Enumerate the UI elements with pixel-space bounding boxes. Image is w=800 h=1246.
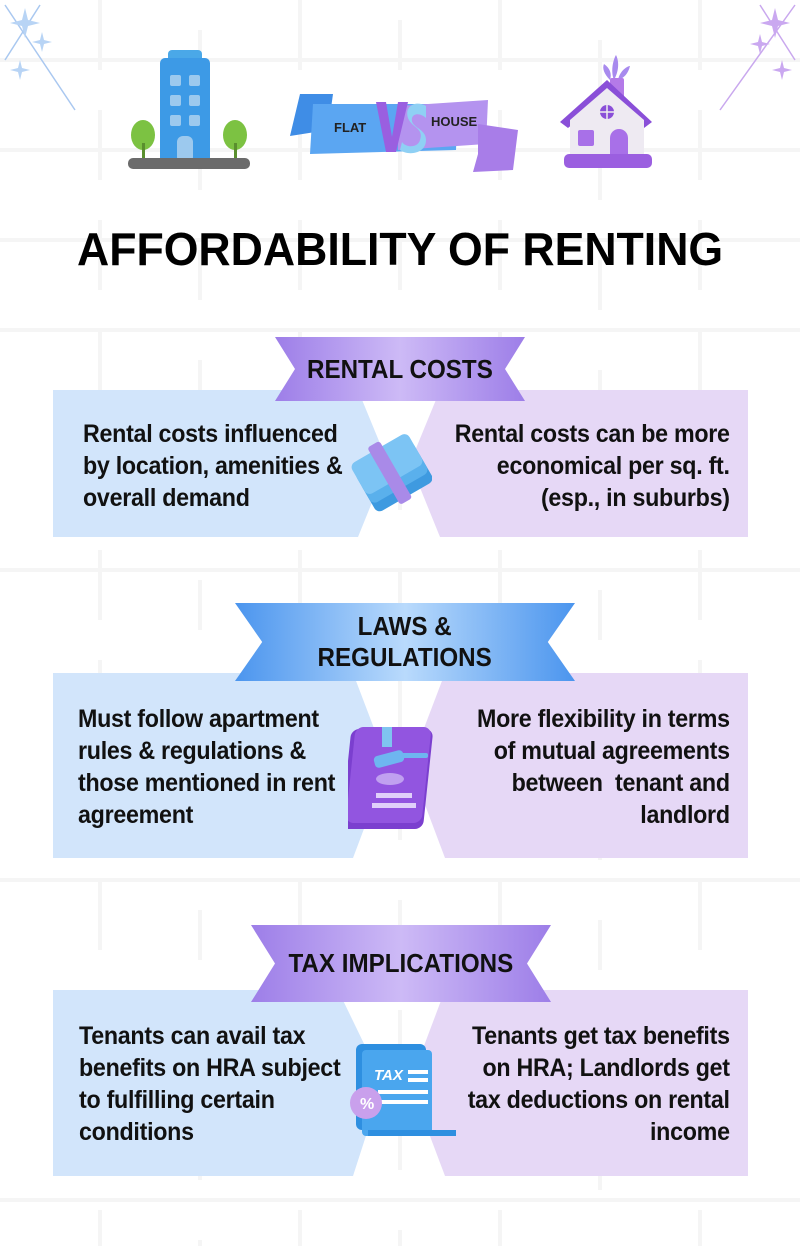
icon: money stack: [352, 434, 432, 512]
heading banner: RENTAL COSTS: [307, 354, 493, 384]
panel: laws & regulations: [53, 603, 748, 858]
panel: rental costs: [53, 337, 748, 537]
text: flat: Must follow apartment: [78, 705, 319, 733]
icon: flat vs house ribbon: HOUSE: [431, 114, 477, 129]
text: house: [468, 1022, 730, 1146]
text: house: economical per sq. ft.: [497, 452, 730, 480]
text: house: between tenant and: [512, 769, 730, 797]
icon: house: [560, 55, 652, 168]
text: flat: agreement: [78, 801, 193, 829]
heading banner: REGULATIONS: [318, 642, 492, 672]
text: house: (esp., in suburbs): [541, 484, 730, 512]
text: house: income: [650, 1118, 730, 1146]
text: flat: [78, 705, 336, 829]
panel backgrounds: [53, 990, 748, 1176]
heading banner: [235, 603, 575, 681]
heading banner: TAX IMPLICATIONS: [289, 948, 513, 978]
text: flat: Rental costs influenced: [83, 420, 338, 448]
text: house: [477, 705, 730, 829]
heading banner: [275, 337, 525, 401]
text: flat: benefits on HRA subject: [79, 1054, 340, 1082]
text: flat: by location, amenities &: [83, 452, 342, 480]
icon: apartment building: [128, 50, 250, 169]
text: flat: those mentioned in rent: [78, 769, 335, 797]
text: flat: overall demand: [83, 484, 250, 512]
text: house: More flexibility in terms: [477, 705, 730, 733]
text: flat: [83, 420, 342, 512]
icon: gavel book: [348, 727, 433, 829]
text: flat: Tenants can avail tax: [79, 1022, 305, 1050]
icon: flat vs house ribbon: [290, 94, 518, 172]
text: house: on HRA; Landlords get: [483, 1054, 730, 1082]
text: house: tax deductions on rental: [468, 1086, 730, 1114]
text: house: landlord: [641, 801, 730, 829]
text: house: [455, 420, 730, 512]
text: flat: [79, 1022, 340, 1146]
title: AFFORDABILITY OF RENTING: [77, 223, 723, 275]
text: flat: to fulfilling certain: [79, 1086, 275, 1114]
heading banner: LAWS &: [358, 611, 452, 641]
icon: tax document: [350, 1044, 456, 1136]
panel: tax implications: [53, 925, 748, 1176]
panel backgrounds: [53, 673, 748, 858]
icon: tax document: TAX: [374, 1067, 404, 1084]
icon: flat vs house ribbon: FLAT: [334, 120, 366, 135]
heading banner: [251, 925, 551, 1002]
panel backgrounds: [53, 390, 748, 537]
text: house: Rental costs can be more: [455, 420, 730, 448]
icon: sparkles left: [4, 4, 76, 110]
text: flat: conditions: [79, 1118, 194, 1146]
text: house: of mutual agreements: [494, 737, 730, 765]
icon: tax document: %: [360, 1096, 374, 1113]
icon: sparkles right: [720, 4, 796, 110]
text: house: Tenants get tax benefits: [472, 1022, 730, 1050]
text: flat: rules & regulations &: [78, 737, 306, 765]
